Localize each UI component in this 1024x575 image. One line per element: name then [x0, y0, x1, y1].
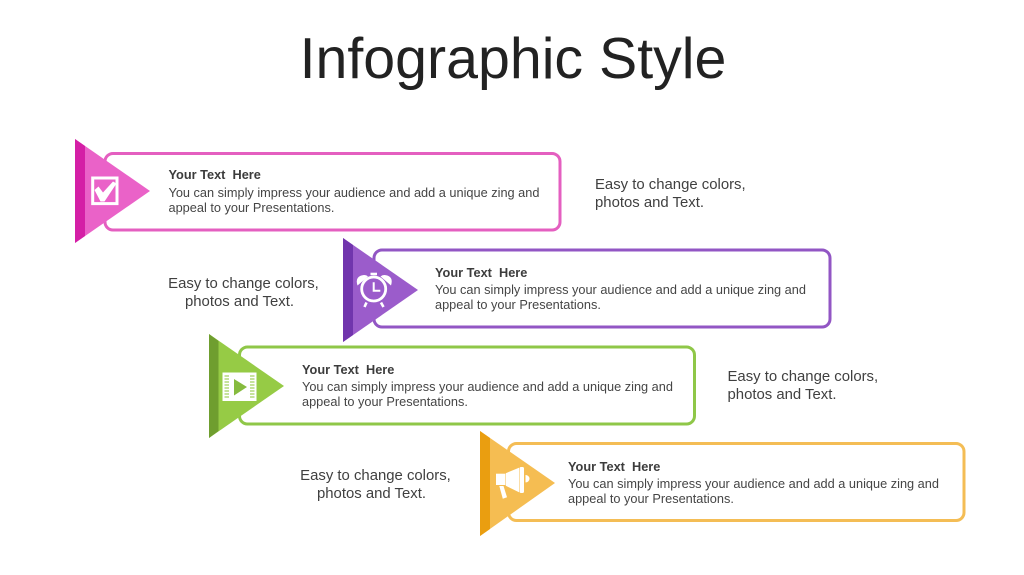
icon: film play: [222, 372, 256, 401]
side text: green row: [728, 368, 878, 402]
text block: purple: [435, 264, 806, 312]
text block: purple: Your Text Here: [435, 264, 527, 280]
text block: purple: You can simply impress your audience and add a unique zing and: [435, 282, 806, 297]
panel: pink box: [105, 154, 560, 230]
text block: yellow: Your Text Here: [568, 458, 660, 474]
side text: pink row: photos and Text.: [595, 195, 704, 211]
text block: green: appeal to your Presentations.: [302, 394, 468, 409]
text block: green: [302, 362, 673, 409]
arrow: pink triangle: [75, 139, 150, 243]
side text: yellow row: photos and Text.: [317, 486, 426, 502]
icon: alarm clock: [357, 273, 392, 307]
side text: purple row: photos and Text.: [185, 294, 294, 310]
panel: green box: [240, 347, 694, 424]
icon: checkbox: [93, 178, 117, 204]
text block: green: Your Text Here: [302, 362, 394, 376]
side text: green row: Easy to change colors,: [728, 368, 878, 384]
arrow: yellow triangle: [480, 431, 555, 536]
text block: green: You can simply impress your audience and add a unique zing and: [302, 379, 673, 394]
text block: pink: Your Text Here: [168, 167, 261, 182]
side text: pink row: [595, 177, 746, 211]
icon: megaphone: [496, 467, 530, 499]
side text: pink row: Easy to change colors,: [595, 177, 746, 193]
title: Infographic Style: [300, 26, 726, 90]
text block: purple: appeal to your Presentations.: [435, 297, 601, 312]
arrow: green triangle: [209, 334, 284, 438]
side text: green row: photos and Text.: [728, 386, 837, 402]
panel: yellow box: [508, 444, 964, 520]
side text: yellow row: [300, 468, 451, 502]
text block: pink: [168, 167, 539, 215]
text block: pink: appeal to your Presentations.: [168, 200, 334, 215]
side text: yellow row: Easy to change colors,: [300, 468, 451, 484]
side text: purple row: Easy to change colors,: [168, 276, 319, 292]
text block: yellow: appeal to your Presentations.: [568, 491, 734, 506]
text block: pink: You can simply impress your audience and add a unique zing and: [168, 185, 539, 200]
text block: yellow: You can simply impress your audience and add a unique zing and: [568, 476, 939, 491]
arrow: purple triangle: [343, 238, 418, 342]
panel: purple box: [374, 250, 830, 327]
side text: purple row: [168, 276, 319, 310]
text block: yellow: [568, 458, 939, 506]
